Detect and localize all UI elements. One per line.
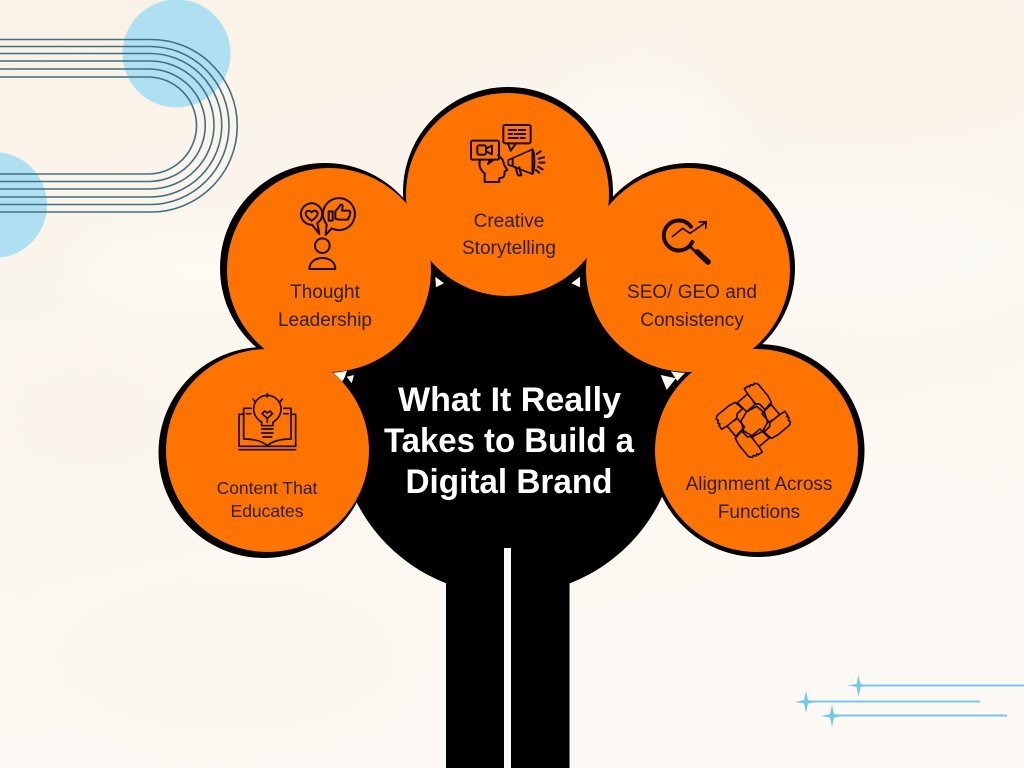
title: Takes to Build a (384, 422, 635, 460)
label: Thought (290, 282, 361, 303)
title: Digital Brand (406, 463, 612, 501)
label line 2: Consistency (640, 310, 744, 331)
circle: SEO/ GEO and Consistency (586, 168, 790, 372)
label: Alignment Across (686, 474, 832, 495)
label line 2: Educates (231, 501, 304, 521)
icon: book with light bulb (239, 394, 296, 450)
circle: Thought Leadership (227, 168, 431, 372)
title: What It Really (398, 381, 621, 419)
label line 2: Functions (718, 502, 800, 523)
central black circle (338, 255, 678, 595)
title (384, 381, 635, 501)
black outer rings of the five circles (158, 87, 864, 558)
icon: video, chat, head and megaphone (471, 125, 545, 182)
label: SEO/ GEO and (627, 282, 757, 303)
label: Content That (217, 478, 318, 498)
decoration: sparkle lines (795, 675, 1024, 727)
label line 2: Storytelling (462, 238, 556, 259)
decoration: top blue circle (122, 0, 230, 108)
decoration: concentric track lines (0, 40, 237, 212)
tree trunk (446, 560, 570, 768)
icon: magnifier with growth arrow (664, 220, 708, 262)
circle: Creative Storytelling (406, 93, 609, 296)
decoration: left blue circle (0, 152, 47, 258)
white notch triangles (347, 277, 676, 390)
icon: four interlocked hands (716, 383, 790, 457)
circle: Alignment Across Functions (655, 349, 858, 552)
label: Creative (474, 211, 544, 232)
label line 2: Leadership (278, 310, 372, 331)
icon: person with reaction bubbles (301, 198, 355, 269)
circle: Content That Educates (166, 349, 369, 552)
trunk centre line (504, 548, 511, 768)
